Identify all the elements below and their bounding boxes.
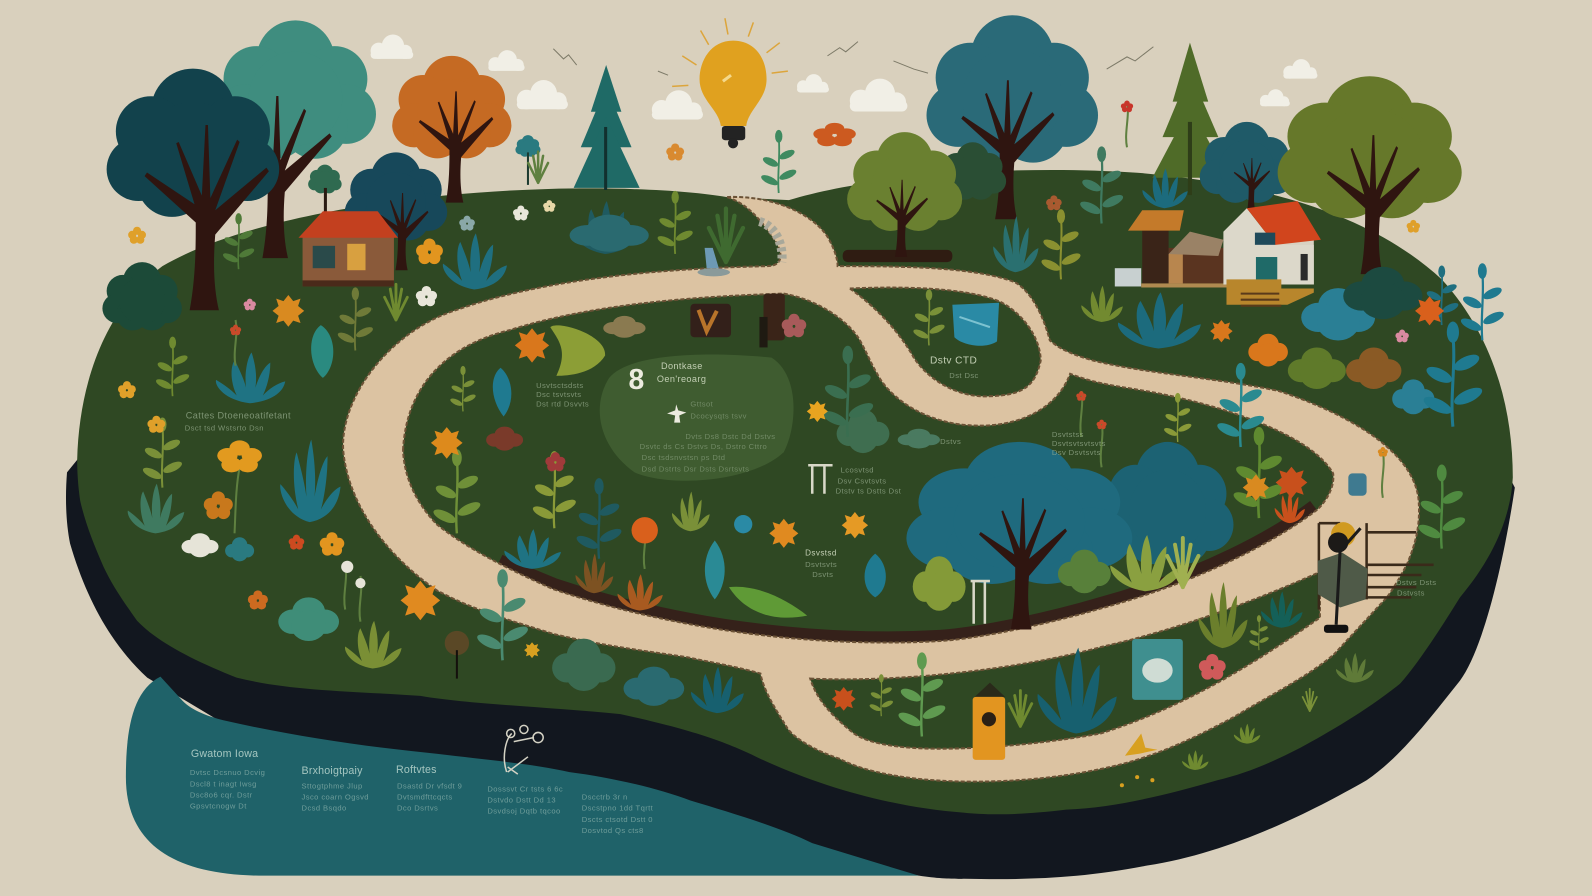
text: footer column 4: [487, 784, 563, 816]
text: footer column 3: Roftvtes: [396, 764, 437, 776]
text: note beside gate: Dstvsts: [1397, 588, 1425, 597]
text: footer column 1: [190, 748, 265, 811]
tree: orange: [392, 56, 511, 203]
inner big tree with bushes: [906, 442, 1233, 630]
text: footer column 2: [302, 765, 369, 813]
text: right note above tree: Dsvtsvtsvtsvts: [1052, 439, 1106, 448]
tree: small teal right: [1200, 122, 1294, 212]
callout: number eight block: [628, 361, 775, 473]
text: footer column 4: Dstvdo Dstt Dd 13: [487, 796, 556, 805]
icon: footer sprig: [504, 725, 543, 774]
icon: light bulb: [672, 18, 788, 148]
tree: olive right: [1278, 76, 1462, 274]
text: footer column 1: Dsc8o6 cqr. Dstr: [190, 790, 253, 799]
plants: fan leaves: [128, 169, 1374, 770]
text: right note above tree: Dsvtstss: [1052, 430, 1084, 439]
tree: olive small: [843, 132, 962, 262]
text: footer column 1: Dscl8 t inagt Iwsg: [190, 779, 257, 788]
text: footer column 1: Dvtsc Dcsnuo Dcvig: [190, 768, 265, 777]
callout body: Dcocysqts tsvv: [690, 412, 747, 421]
text: footer column 2: Sttogtphme Jlup: [302, 781, 363, 790]
text: pond note: Dst Dsc: [949, 371, 979, 380]
text: note beside signposts: Dtstv ts Dstts Dst: [836, 487, 902, 496]
panel: teal footer: [126, 677, 919, 876]
dark base of the island: [66, 305, 1515, 879]
callout heading: Dontkase: [661, 361, 703, 371]
text: footer column 3: Dco Dsrtvs: [397, 804, 438, 813]
house: wooden cabin: [1115, 210, 1228, 287]
path: winding trail: [343, 197, 1419, 782]
icon: birds: [553, 42, 1153, 75]
panel: garden island: [77, 170, 1513, 814]
text: inner note by orange rose: [536, 381, 589, 408]
text: footer column 1: Gpsvtcnogw Dt: [190, 802, 247, 811]
tree: back left mint: [215, 20, 376, 258]
icon: gate and watering can: [1318, 473, 1434, 633]
text: footer column 5: Dscstpno 1dd Tqrtt: [582, 804, 654, 813]
text: footer column 3: [396, 764, 462, 813]
plants: stems with red and pink buds: [230, 101, 1409, 622]
text: footer column 3: Dvtsmdfttcqcts: [397, 792, 453, 801]
plants: orange and yellow flowers: [118, 123, 1444, 711]
text: left meadow note: Dsct tsd Wstsrto Dsn: [185, 424, 264, 433]
callout body: Dsvtc ds Cs Dstvs Ds, Dstro Cttro: [640, 442, 767, 451]
text: footer column 4: Dosssvt Cr tsts 6 6c: [487, 784, 563, 793]
text: footer column 2: Dcsd Bsqdo: [302, 804, 347, 813]
text: pond note: Dstv CTD: [930, 356, 977, 367]
icon: teal card: [1132, 639, 1183, 700]
text: note beside blue pod: Dsvts: [812, 570, 833, 579]
text: footer column 5: Dscctrb 3r n: [582, 792, 628, 801]
house: white cottage: [1223, 201, 1321, 306]
text: note beside signposts: Lcosvtsd: [841, 465, 874, 474]
tree: tiny teal lollipops: [308, 135, 541, 216]
callout subheading: Oen'reoarg: [657, 374, 706, 384]
callout body: Gttsot: [690, 399, 714, 408]
text: footer column 2: Jsco coarn Ogsvd: [302, 792, 369, 801]
text: footer column 2: Brxhoigtpaiy: [302, 765, 363, 777]
plants: leafy stems: [141, 130, 1506, 737]
tree: dark back: [939, 142, 1006, 200]
text: footer column 5: Dosvtod Qs cts8: [582, 826, 644, 835]
tree: blue small: [345, 152, 447, 270]
plants: round bushes: [182, 215, 1434, 706]
text: inner note by orange rose: Dsc tsvtsvts: [536, 390, 582, 399]
icon: bench at path top: [698, 221, 782, 276]
icon: white signpost pairs: [808, 465, 990, 624]
text: footer column 1: Gwatom Iowa: [191, 748, 258, 760]
callout body: Dsc tsdsnvstsn ps Dtd: [642, 453, 725, 462]
text: left meadow note: Cattes Dtoeneoatifetant: [186, 411, 291, 421]
text: note beside signposts: Dsv Csvtsvts: [838, 477, 886, 486]
text: footer column 4: Dsvdsoj Dqtb tqcoo: [487, 807, 561, 816]
text: inner note by orange rose: Usvtsctsdsts: [536, 381, 584, 390]
text: right note above tree: [1052, 430, 1106, 457]
callout body: Dvts Ds8 Dstc Dd Dstvs: [685, 432, 775, 441]
text: footer column 3: Dsastd Dr vfsdt 9: [397, 781, 462, 790]
text: right note above tree: Dsv Dsvtsvts: [1052, 448, 1101, 457]
text: note beside blue pod: [805, 549, 837, 579]
icon: pond tile: [952, 303, 999, 346]
text: footer column 5: Dscts ctsotd Dstt 0: [582, 815, 653, 824]
text: note beside gate: Dstvs Dsts: [1396, 578, 1436, 587]
inner garden lighter blob: [600, 354, 794, 481]
house: left red roof: [298, 211, 398, 286]
text: note beside signposts: [836, 465, 902, 496]
text: note beside blue pod: Dsvtsvts: [805, 560, 837, 569]
callout body: [640, 399, 775, 473]
number badge: 8: [628, 364, 644, 396]
tree: central teal: [927, 15, 1098, 219]
text: inner note by orange rose: Dst rtd Dsvvts: [536, 399, 589, 408]
callout body: Dsd Dstrts Dsr Dsts Dsrtsvts: [642, 464, 749, 473]
icon: stump cluster: [690, 294, 785, 347]
icon: teal leaf pods: [311, 325, 886, 618]
tree: bush far left: [102, 262, 182, 330]
tree: dark teal left: [107, 69, 279, 310]
text: pond note: [930, 356, 979, 380]
text: note beside blue pod: Dsvstsd: [805, 549, 837, 558]
tree: teal pine: [574, 65, 640, 190]
icon: clouds: [371, 35, 1317, 119]
icon: seed pod: [445, 631, 469, 679]
plants: grass tufts: [385, 152, 1317, 726]
text: small label near shrub: Dstvs: [940, 437, 961, 446]
text: left meadow note: [185, 411, 291, 433]
text: note beside gate: [1396, 578, 1436, 597]
icon: orange small arrow plant: [1120, 733, 1157, 787]
icon: pink flower bunch: [782, 314, 806, 337]
icon: orange lantern sign: [973, 683, 1005, 760]
tree: green pine: [1152, 43, 1229, 195]
text: footer column 5: [582, 792, 654, 835]
panel: soil edge of inner garden: [498, 510, 1317, 643]
icon: white sprout: [667, 404, 686, 423]
